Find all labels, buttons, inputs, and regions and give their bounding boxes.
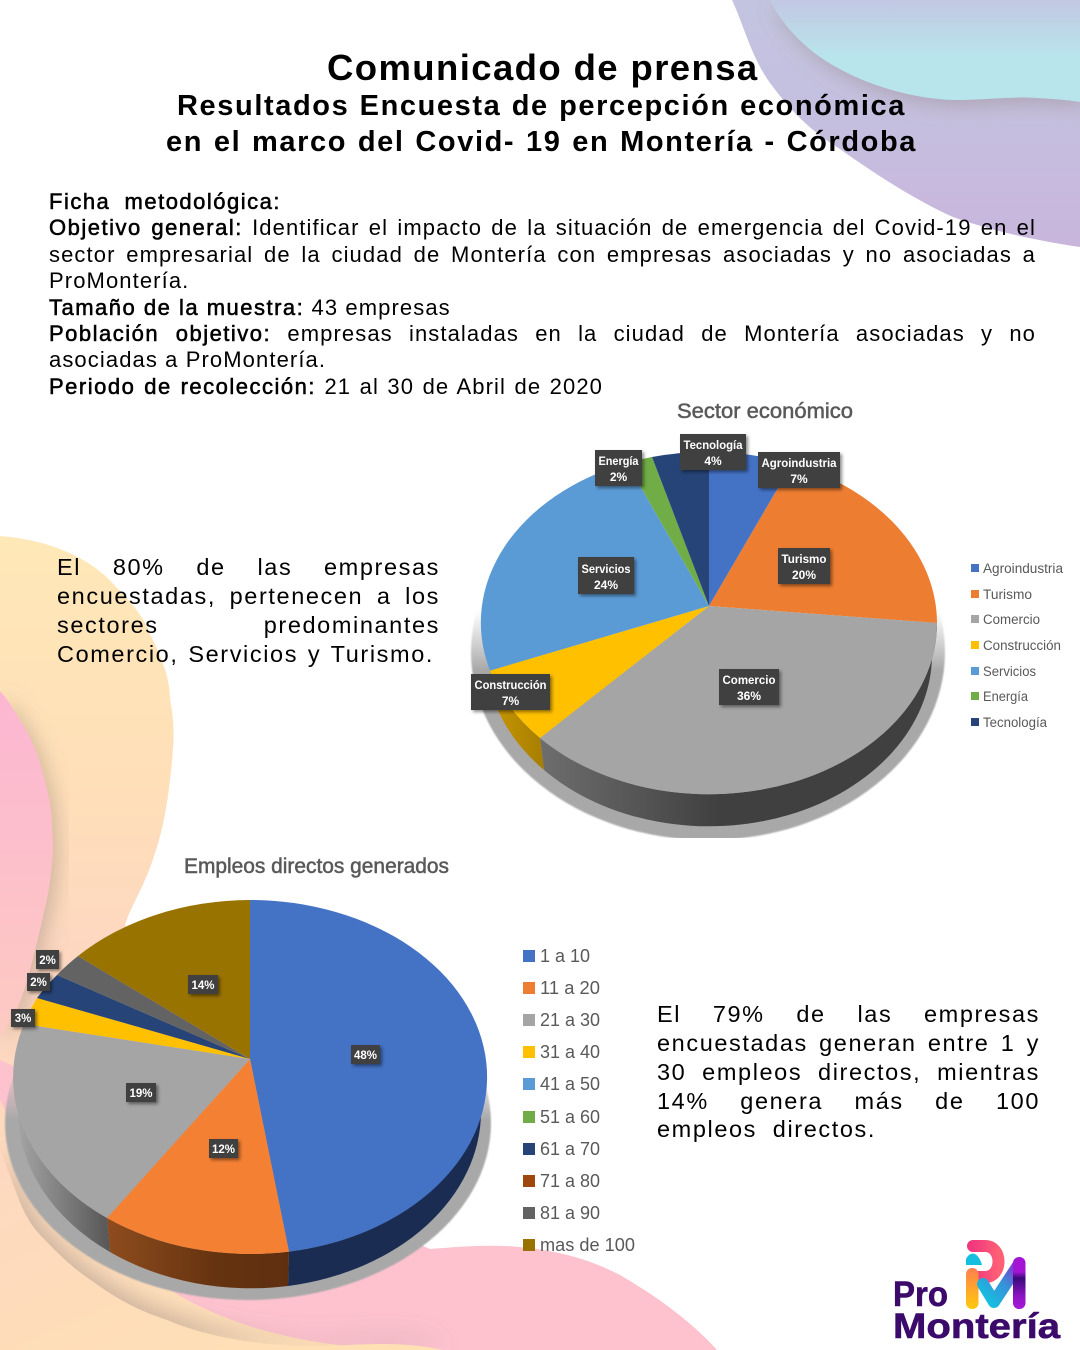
data label: Energía 2%: Energía	[598, 454, 639, 468]
legend: empleos: 31 a 40	[540, 1042, 600, 1062]
data label: 2% lower: 2%	[30, 977, 47, 989]
text block: ficha metodológica: Periodo de recolección: 21 al 30 de Abril de 2020	[49, 374, 603, 399]
slice: Construcción	[490, 606, 709, 738]
data label: 12%: 12%	[212, 1144, 235, 1156]
data label: Turismo 20%	[778, 548, 830, 584]
text block: ficha metodológica: Ficha metodológica:	[49, 189, 281, 214]
slice: Energía	[627, 457, 709, 606]
chart: Empleos directos generados	[5, 855, 635, 1300]
text block: 79% de las empresas: encuestadas generan entre 1 y	[657, 1030, 1040, 1056]
text block: ficha metodológica: Objetivo general: Identificar el impacto de la situación de emergencia del Covid-19 en el	[49, 215, 1036, 240]
text block: 80% de las empresas: encuestadas, pertenecen a los	[57, 583, 440, 609]
slice: 61 a 70	[37, 975, 250, 1059]
data label: Agroindustria 7%: Agroindustria	[762, 456, 837, 470]
chart title: Sector económico: Sector económico	[677, 400, 853, 423]
data label: Construcción 7%	[471, 674, 550, 710]
legend: empleos: 41 a 50	[540, 1074, 600, 1094]
data label: Servicios 24%: 24%	[594, 578, 618, 592]
slice: 11 a 20	[107, 1059, 289, 1254]
legend: empleos: 81 a 90	[540, 1203, 600, 1223]
chart: Sector económico	[471, 400, 1063, 840]
text block: 79% de las empresas: empleos directos.	[657, 1116, 876, 1142]
data label: 19%	[126, 1083, 156, 1102]
data label: 19%: 19%	[129, 1088, 153, 1100]
pie side: 21 a 30	[13, 1077, 110, 1252]
data label: Comercio 36%: Comercio	[722, 673, 776, 687]
legend: sector económico: Agroindustria	[983, 561, 1063, 576]
chart title: Empleos directos generados: Empleos directos generados	[184, 855, 449, 878]
heading line: en el marco del Covid: en el marco del Covid- 19 en Montería - Córdoba	[166, 126, 917, 158]
data label: Turismo 20%: Turismo	[782, 552, 826, 566]
text block: 80% de las empresas: sectores predominantes	[57, 612, 440, 638]
slice: Servicios	[481, 463, 709, 671]
text block: 80% de las empresas	[57, 554, 440, 667]
title	[166, 47, 917, 158]
legend: empleos: mas de 100	[540, 1235, 635, 1255]
text block: ficha metodológica: ProMontería.	[49, 268, 189, 293]
legend: sector económico: Tecnología	[983, 715, 1047, 730]
text block: 79% de las empresas: El 79% de las empresas	[657, 1001, 1040, 1027]
text block: 80% de las empresas: El 80% de las empresas	[57, 554, 440, 580]
data label: Tecnología 4%	[680, 434, 746, 470]
legend: empleos	[523, 946, 635, 1255]
legend: empleos: 11 a 20	[540, 978, 600, 998]
slice: Tecnología	[652, 452, 709, 606]
data label: Construcción 7%: 7%	[502, 694, 520, 708]
data label: Agroindustria 7%	[758, 452, 840, 488]
legend: empleos: 61 a 70	[540, 1139, 600, 1159]
text block: 80% de las empresas: Comercio, Servicios y Turismo.	[57, 641, 434, 667]
pie side: 11 a 20	[107, 1218, 289, 1288]
data label: Comercio 36%: 36%	[737, 689, 761, 703]
logo text: Montería: Montería	[893, 1307, 1061, 1346]
legend: sector económico: Comercio	[983, 612, 1040, 627]
pie side: comercio	[540, 623, 937, 826]
heading line: Resultados Encuesta: Resultados Encuesta de percepción económica	[177, 90, 906, 122]
legend: empleos: 71 a 80	[540, 1171, 600, 1191]
legend: sector económico: Servicios	[983, 664, 1036, 679]
data label: Turismo 20%: 20%	[792, 568, 816, 582]
logo: ProMontería	[893, 1246, 1061, 1346]
pie shadow	[470, 616, 946, 838]
data label: 3%: 3%	[15, 1013, 31, 1025]
legend: sector económico: Energía	[983, 689, 1028, 704]
slice: Comercio	[540, 606, 937, 794]
data label: 2% lower	[27, 973, 50, 991]
data label: Energía 2%	[595, 450, 642, 486]
legend: sector económico: Construcción	[983, 638, 1061, 653]
text block: ficha metodológica: sector empresarial de la ciudad de Montería con empresas asociadas y no asociadas a	[49, 242, 1036, 267]
logo text: Pro: Pro	[893, 1275, 948, 1314]
data label: Tecnología 4%: 4%	[704, 454, 722, 468]
data label: 12%	[209, 1139, 238, 1158]
pie shadow	[5, 946, 491, 1300]
logo mark: PM	[966, 1246, 1026, 1309]
data label: 14%	[188, 975, 218, 994]
text block: ficha metodológica: asociadas a ProMontería.	[49, 347, 326, 372]
legend: empleos: 51 a 60	[540, 1107, 600, 1127]
text block: 79% de las empresas: 30 empleos directos, mientras	[657, 1059, 1040, 1085]
data label: 2% upper	[36, 950, 59, 969]
text block: 79% de las empresas	[657, 1001, 1040, 1142]
slice: 31 a 40	[24, 998, 250, 1059]
legend: empleos: 21 a 30	[540, 1010, 600, 1030]
data label: 14%: 14%	[191, 980, 215, 992]
text block: ficha metodológica	[49, 189, 1036, 399]
slice: Agroindustria	[709, 452, 792, 606]
slice: 1 a 10	[250, 900, 487, 1252]
legend: sector económico: Turismo	[983, 587, 1032, 602]
legend: empleos: 1 a 10	[540, 946, 590, 966]
data label: Energía 2%: 2%	[610, 470, 628, 484]
data label: Servicios 24%	[578, 557, 634, 594]
data label: Comercio 36%	[719, 669, 779, 705]
slice: mas de 100	[78, 900, 250, 1059]
slice: 21 a 30	[13, 1024, 250, 1218]
data label: Agroindustria 7%: 7%	[790, 472, 808, 486]
data label: 48%: 48%	[354, 1050, 377, 1062]
heading line: Comunicado de prensa: Comunicado de prensa	[327, 47, 759, 88]
data label: Servicios 24%: Servicios	[582, 562, 631, 576]
charts and logo	[4, 402, 1064, 1338]
slice: 81 a 90	[57, 956, 250, 1059]
data label: 3%	[11, 1009, 35, 1027]
legend: sector económico	[971, 561, 1063, 730]
text block: ficha metodológica: Población objetivo: empresas instaladas en la ciudad de Montería asociadas y no	[49, 321, 1036, 346]
text block: 79% de las empresas: 14% genera más de 100	[657, 1088, 1040, 1114]
data label: Construcción 7%: Construcción	[474, 678, 546, 692]
data label: 2% upper: 2%	[39, 955, 56, 967]
text block: ficha metodológica: Tamaño de la muestra: 43 empresas	[49, 295, 451, 320]
data label: Tecnología 4%: Tecnología	[684, 438, 743, 452]
slice: Turismo	[709, 464, 937, 623]
data label: 48%	[351, 1045, 380, 1064]
pie side: construcción	[490, 671, 544, 770]
pie side: 1 a 10	[288, 1077, 487, 1286]
